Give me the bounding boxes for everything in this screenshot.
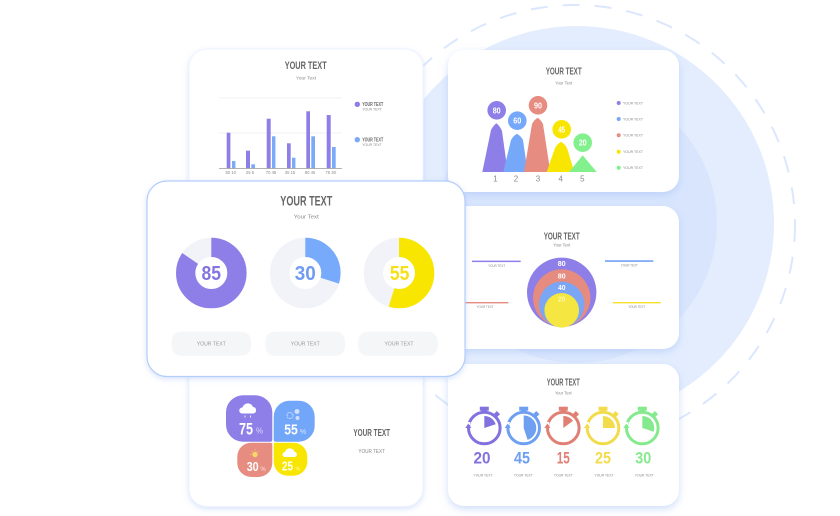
donut: 30: 30 [295,263,316,285]
subheading: Your Text [294,214,319,220]
bar chart: 80 45 [305,170,316,175]
callout lines: YOUR TEXT [628,305,646,309]
peak chart: 80 [493,105,501,115]
panel: weather tiles card [189,340,423,506]
bar chart: 35 15 [285,170,296,175]
concentric circles chart: 20 [558,295,565,304]
panel: peaks chart card [448,50,679,192]
label button 1: YOUR TEXT [197,342,226,348]
bar chart: 75 30 [325,170,337,175]
bar chart: 50 10 [225,170,237,175]
stopwatch: 20: YOUR TEXT [473,474,493,478]
caption: YOUR TEXT [358,449,385,455]
weather tile: yellow 25%: % [296,466,301,472]
panel: bar chart card [189,49,423,219]
panel: main donut card [147,181,465,376]
peak chart: 90 [534,100,542,110]
label button 1 [172,332,251,356]
stopwatch: 30: 30 [635,448,651,468]
weather tile: blue 55%: 55 [284,422,298,439]
weather tile: red 30% [237,443,272,477]
heading: YOUR TEXT [280,192,333,208]
concentric circles chart: 80 [558,259,566,268]
background: large circles [355,5,795,445]
donut: 55: 55 [390,263,409,285]
legend: YOUR TEXT [362,138,383,144]
donut: 85: 85 [202,263,221,285]
weather tile: yellow 25%: 25 [282,458,293,473]
stopwatch: 20: 20 [473,448,490,468]
stopwatch: 45: 45 [514,448,530,468]
peak chart [482,96,597,183]
peak chart: 5 [580,174,585,183]
peak chart: 1 [493,174,498,183]
concentric circles chart: 80 [558,271,566,280]
legend: YOUR TEXT [362,108,383,112]
stopwatch: 25 [584,407,619,478]
peak chart: 4 [558,174,563,183]
bar chart: 25 5 [246,170,255,175]
peak chart: 60 [513,116,522,126]
callout lines: YOUR TEXT [621,264,639,268]
legend: YOUR TEXT [623,117,644,121]
callout lines: YOUR TEXT [476,305,494,309]
panel: stopwatch card [448,364,679,506]
stopwatch: 15: 15 [557,448,570,468]
weather tile: blue 55%: % [300,429,306,436]
label button 3: YOUR TEXT [384,342,414,348]
legend [617,101,644,170]
legend: YOUR TEXT [623,134,644,138]
subheading: Your Text [296,76,317,80]
weather tile: purple 75%: 75 [239,420,253,438]
stopwatch: 30 [623,407,658,478]
stopwatch: 15 [544,407,579,478]
weather tile: yellow 25% [274,443,307,476]
weather tile: purple 75%: % [256,426,263,436]
subheading: Your Text [553,243,571,248]
legend: YOUR TEXT [362,143,383,147]
peak chart: 45 [558,124,565,134]
legend: YOUR TEXT [623,166,644,170]
weather tile: red 30%: % [260,467,266,473]
heading: YOUR TEXT [547,378,580,388]
stopwatch: 25: YOUR TEXT [594,474,614,478]
weather tile: red 30%: 30 [247,459,259,474]
peak chart: 2 [514,174,519,183]
donut: 85 [186,247,237,299]
donut: 55 [373,247,425,299]
subheading: Your Text [555,80,573,85]
weather tile: purple 75% [226,395,272,442]
concentric circles chart: 40 [558,283,565,292]
stopwatch: 45: YOUR TEXT [514,474,533,478]
label button 3 [358,332,438,356]
concentric circles chart [527,258,596,328]
callout lines: YOUR TEXT [488,264,506,268]
weather tile: blue 55% [274,401,315,442]
label button 2: YOUR TEXT [291,342,320,348]
legend: YOUR TEXT [623,150,644,154]
peak chart: 3 [536,174,541,183]
stopwatch: 30: YOUR TEXT [635,474,654,478]
legend: YOUR TEXT [623,101,644,105]
heading: YOUR TEXT [546,66,582,78]
panel: concentric circles card [448,206,679,349]
legend [355,102,383,147]
donut: 30 [280,247,331,299]
bar chart [219,98,342,175]
heading: YOUR TEXT [285,60,327,72]
label button 2 [265,332,345,356]
peak chart: 20 [579,138,587,148]
subheading: Your Text [555,390,572,395]
callout lines [465,260,661,309]
heading: YOUR TEXT [544,231,580,243]
stopwatch: 20 [465,407,500,478]
stopwatch: 45 [505,407,540,478]
heading: YOUR TEXT [353,427,390,439]
stopwatch: 25: 25 [595,448,611,468]
stopwatch: 15: YOUR TEXT [554,474,573,478]
legend: YOUR TEXT [362,102,383,108]
bar chart: 70 45 [266,170,277,175]
